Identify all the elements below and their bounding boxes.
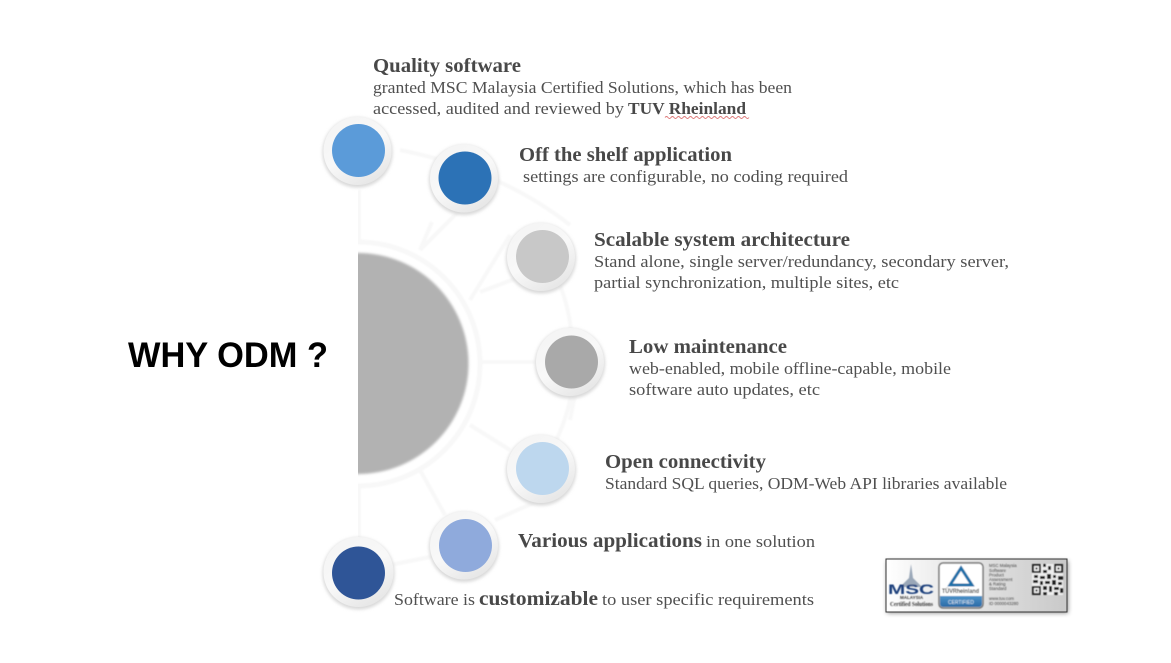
central half circle xyxy=(358,252,470,476)
certificate details: Software xyxy=(989,568,1007,573)
node: quality software xyxy=(322,117,392,188)
certificate details: MSC Malaysia xyxy=(989,563,1017,568)
TUV Rheinland logo: TÜVRheinland xyxy=(942,586,979,595)
certification badge xyxy=(886,559,1068,613)
node: scalable xyxy=(506,223,576,294)
text: customizable: customizable xyxy=(479,588,598,610)
text: low maintenance: software auto updates, etc xyxy=(629,380,820,399)
background connector network xyxy=(236,150,575,565)
certificate details: & Rating xyxy=(989,582,1006,586)
node: off the shelf xyxy=(429,144,499,215)
title: WHY ODM ? xyxy=(128,336,328,375)
text: scalable system architecture xyxy=(594,229,1009,292)
text: off the shelf application: Off the shelf application xyxy=(519,144,732,166)
MSC Malaysia logo: MALAYSIA xyxy=(900,595,924,600)
text: various applications: in one solution xyxy=(706,532,815,551)
MSC Malaysia logo: MSC xyxy=(888,581,934,597)
text: off the shelf application xyxy=(519,144,849,186)
text: quality software: Quality software xyxy=(373,55,521,77)
certificate details: ID 0000043280 xyxy=(989,601,1019,606)
TUV Rheinland logo xyxy=(939,563,983,608)
node: low maintenance xyxy=(535,328,605,398)
certificate details xyxy=(989,563,1019,606)
text: scalable system architecture: partial synchronization, multiple sites, etc xyxy=(594,273,899,292)
text: quality software xyxy=(373,55,792,118)
text: various applications: Various applications xyxy=(518,530,702,552)
text: low maintenance xyxy=(629,336,951,399)
QR code xyxy=(1032,564,1063,595)
text: quality software: accessed, audited and reviewed by xyxy=(373,99,625,118)
text: scalable system architecture: Scalable system architecture xyxy=(594,229,850,251)
TUV Rheinland logo: CERTIFIED xyxy=(948,600,974,606)
text: customizable: Software is xyxy=(394,590,475,609)
text: scalable system architecture: Stand alone, single server/redundancy, secondary server, xyxy=(594,252,1009,271)
text: quality software: granted MSC Malaysia Certified Solutions, which has been xyxy=(373,78,792,97)
text: open connectivity: Standard SQL queries, ODM-Web API libraries available xyxy=(605,474,1007,493)
node: open connectivity xyxy=(506,435,576,506)
node: customizable xyxy=(322,537,394,610)
text: open connectivity xyxy=(605,451,1007,493)
text: off the shelf application: settings are configurable, no coding required xyxy=(523,167,849,186)
text: low maintenance: web-enabled, mobile offline-capable, mobile xyxy=(629,359,951,378)
certificate details: Standard xyxy=(989,586,1007,591)
MSC Malaysia logo xyxy=(888,564,934,608)
certificate details: Product xyxy=(989,572,1005,578)
text: various applications xyxy=(518,530,815,552)
text: open connectivity: Open connectivity xyxy=(605,451,766,473)
node: various applications xyxy=(429,512,499,582)
certificate details: Assessment xyxy=(989,577,1013,582)
MSC Malaysia logo: Certified Solutions xyxy=(890,602,934,608)
text: low maintenance: Low maintenance xyxy=(629,336,787,358)
certificate details: www.tuv.com xyxy=(989,596,1014,601)
text: quality software: TUV Rheinland xyxy=(628,99,747,118)
text: customizable: to user specific requirements xyxy=(602,590,814,609)
text: customizable xyxy=(394,588,814,610)
